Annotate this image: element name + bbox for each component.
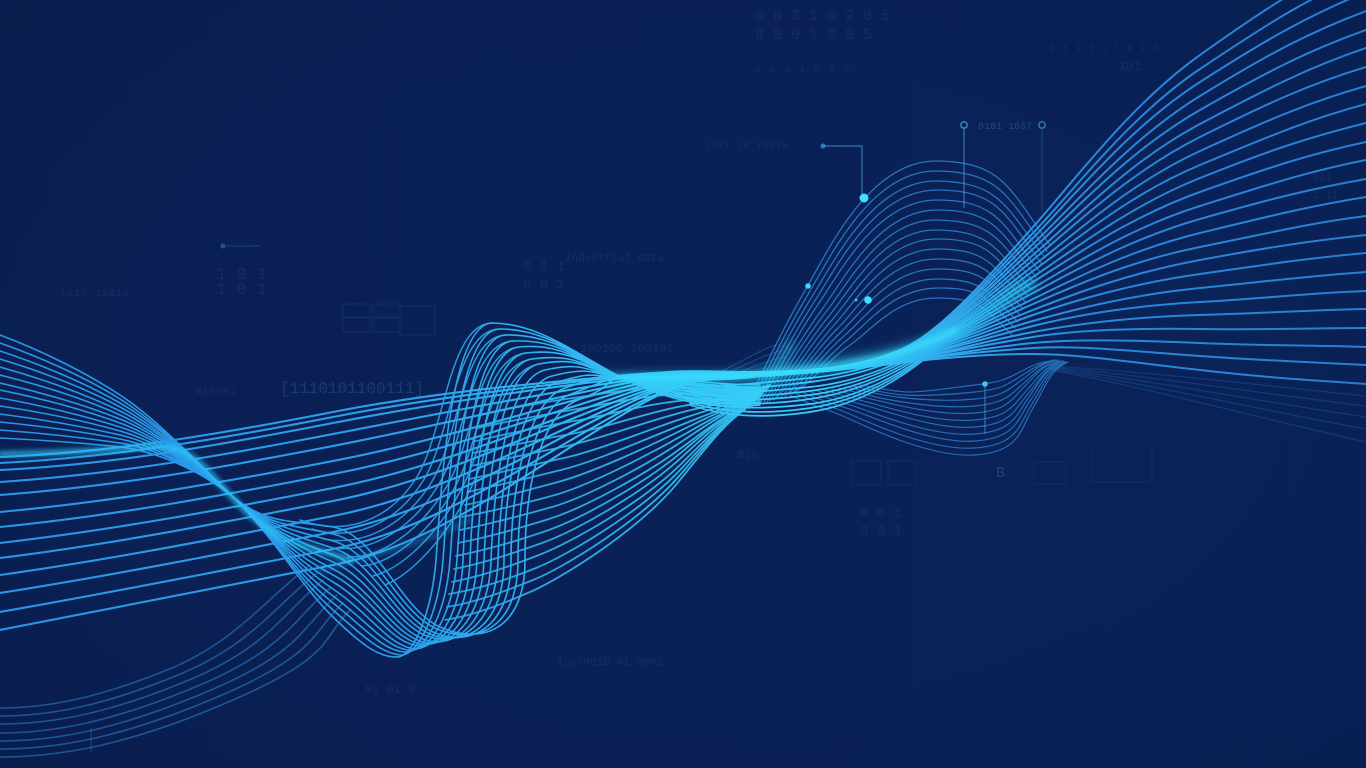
faint background data text and tables: 101 — [1118, 59, 1142, 74]
callout: connector lines and nodes — [91, 122, 1045, 752]
wave: lower bulge family — [790, 360, 1068, 455]
wave: faint strands below right fan — [1050, 366, 1366, 442]
faint background data text and tables: Industrial data — [565, 253, 664, 265]
faint background data text and tables: 1 0 1 — [216, 281, 267, 300]
faint background data text and tables: Inst0010 01 0001 — [557, 657, 663, 669]
wave: faint lower-left strands — [0, 565, 350, 757]
faint background data text and tables: 100106 100101 — [580, 342, 674, 356]
faint background data text and tables: 0 1 1 — [523, 259, 565, 275]
faint background data text and tables: 1 0 1 — [216, 266, 267, 285]
wave: right fan — [760, 0, 1366, 384]
faint background data text and tables: 8 0 9 1 0 0 5 — [755, 27, 872, 44]
faint background data text and tables: 8 0 1 — [860, 524, 902, 540]
faint background data text and tables: 1 11 — [1312, 190, 1339, 202]
faint background data text and tables: 1 0 1 1 0 1 0 — [755, 65, 851, 75]
faint background data text and tables: B — [996, 465, 1005, 482]
wave: left loop family — [0, 323, 760, 657]
faint background data text and tables: 01 01 0 — [365, 683, 415, 697]
faint background data text and tables: 1010 10010 — [60, 289, 130, 300]
faint background data text and tables: 0 0 3 1 0 2 0 5 — [755, 8, 890, 25]
wave: sweep right of the mesh — [445, 385, 770, 620]
faint background data text and tables: 0101 1037 — [978, 122, 1032, 133]
faint background data text and tables: 8 0 1 — [860, 506, 902, 522]
wave: small faint crest near centre — [715, 345, 785, 376]
faint background data text and tables: 111 — [1312, 172, 1332, 184]
wave: upper hump family — [745, 161, 1050, 410]
faint background data text and tables: 0 1 1 1 1 1 0 1 8 — [1050, 44, 1159, 54]
faint background data text and tables: 6 0 1 — [523, 277, 565, 293]
wave: slanted feet of the left peak — [300, 323, 539, 585]
faint background data text and tables: 010101 — [195, 387, 237, 398]
faint background data text and tables: 1001 10 10010 — [705, 141, 788, 151]
wave: sagging ribbon under the central streak — [690, 322, 965, 416]
glow: bright central streak — [0, 285, 1030, 570]
faint background data text and tables: B10 — [738, 450, 758, 462]
wave: long left strands — [0, 371, 760, 630]
faint background data text and tables: [1110101100111] — [280, 380, 424, 398]
